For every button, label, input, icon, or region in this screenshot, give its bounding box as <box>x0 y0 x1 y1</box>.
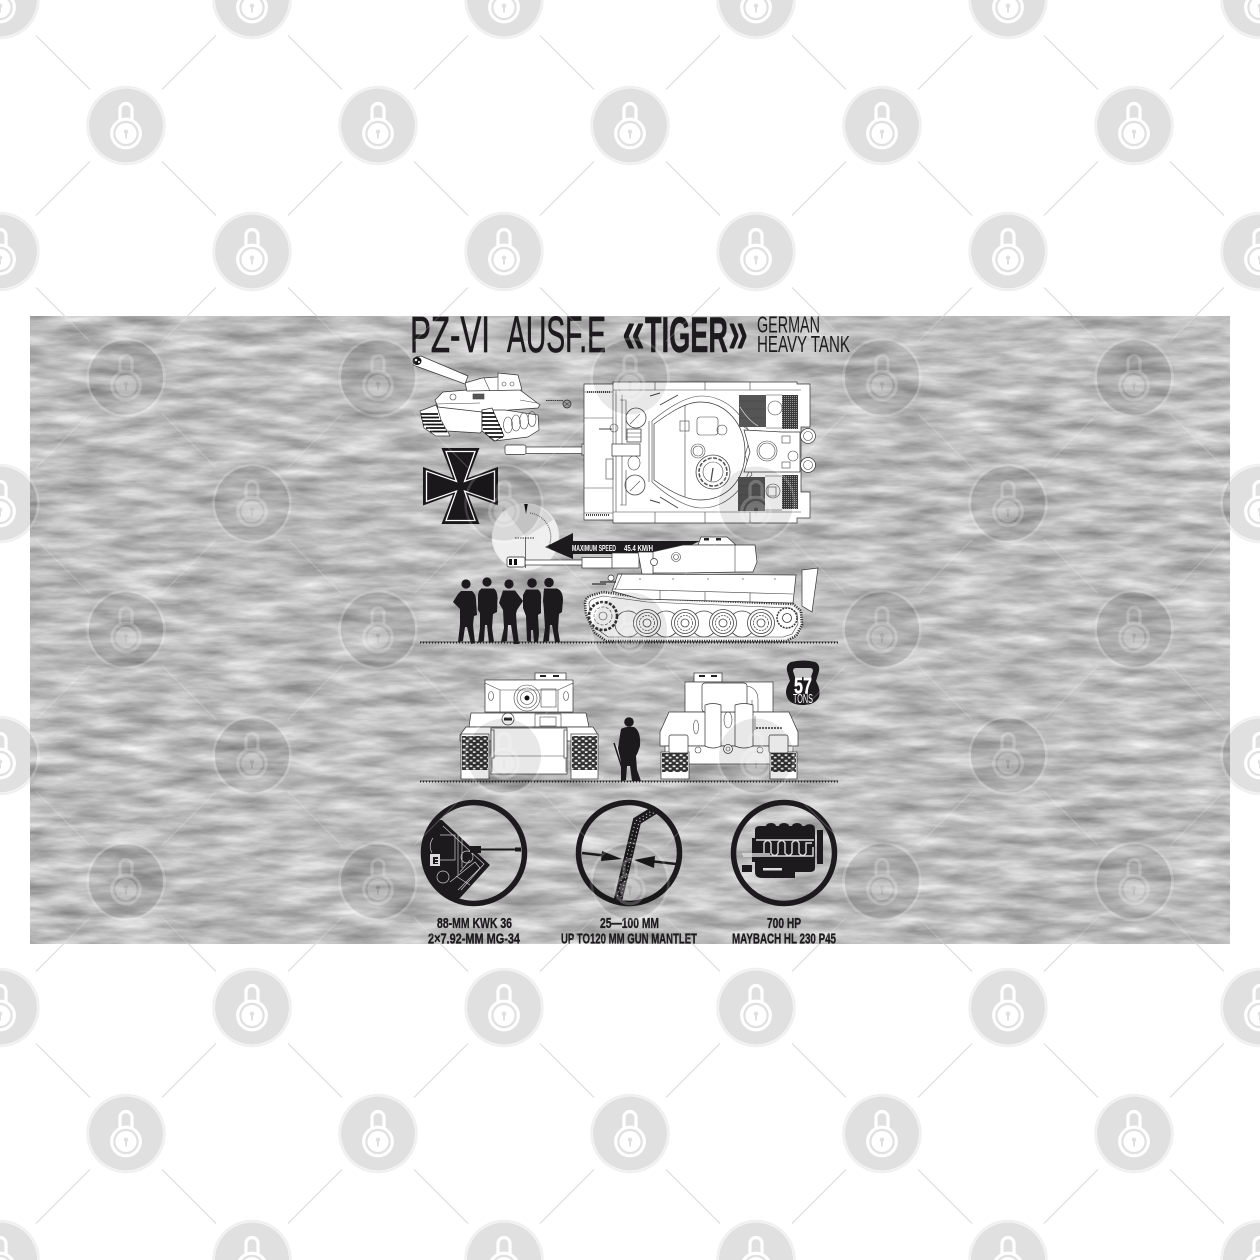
maximum speed arrow: 45.4 KM/H <box>624 543 653 553</box>
title: » <box>728 295 748 367</box>
gun through hull <box>612 444 640 456</box>
caption: armour: UP TO120 MM GUN MANTLET <box>561 930 697 948</box>
turret <box>649 396 752 508</box>
top view of the tank <box>505 382 816 523</box>
running gear <box>585 592 802 641</box>
title <box>410 295 850 367</box>
caption: engine <box>732 915 836 948</box>
caption: engine: 700 HP <box>767 915 801 932</box>
rear compartment <box>744 430 800 472</box>
perspective view of the tank <box>412 356 540 441</box>
gun sight reticle <box>492 504 559 570</box>
watermark: padlock lattice over the panel <box>30 316 1230 944</box>
side gun <box>507 552 658 574</box>
title: PZ-VI <box>410 306 490 363</box>
caption: armour <box>561 915 697 948</box>
weight badge: 57 tons <box>786 660 820 706</box>
weight badge: 57 tons: TONS <box>793 692 813 706</box>
small marking next to perspective view <box>546 400 571 408</box>
turret side <box>698 537 736 545</box>
engine deck <box>738 395 800 511</box>
gun barrel <box>505 444 614 455</box>
rear view of the tank <box>660 673 798 779</box>
title: AUSF.E <box>507 306 606 363</box>
title: HEAVY TANK <box>757 331 850 357</box>
crew silhouettes <box>453 577 563 644</box>
front view of the tank <box>460 673 598 779</box>
caption: armament: 88-MM KWK 36 <box>437 915 512 932</box>
caption: engine: MAYBACH HL 230 P45 <box>732 930 836 948</box>
iron cross emblem <box>423 448 498 524</box>
title: « <box>622 295 645 367</box>
icon: armour plate <box>578 802 680 904</box>
hatches on hull front <box>599 393 678 508</box>
hull side <box>612 574 796 603</box>
caption: armament: 2×7.92-MM MG-34 <box>428 930 520 948</box>
title: GERMAN <box>757 312 820 338</box>
side view of the tank <box>507 537 818 641</box>
caption: armament <box>428 915 520 948</box>
rear plate <box>802 568 818 612</box>
ground line under front and rear views <box>420 780 838 782</box>
panel: heather grey fabric <box>30 316 1230 944</box>
maximum speed arrow <box>545 533 700 559</box>
title: TIGER <box>645 307 728 363</box>
maximum speed arrow: MAXIMUM SPEED <box>572 543 616 553</box>
exhausts at the rear <box>800 428 816 472</box>
weight badge: 57 tons: 57 <box>794 672 812 698</box>
icon: armament <box>420 800 528 906</box>
hull outline <box>584 382 810 523</box>
icon: engine <box>734 802 834 904</box>
caption: armour: 25—100 MM <box>600 915 659 932</box>
soldier silhouette <box>614 717 641 781</box>
ground line under side view <box>420 641 838 644</box>
